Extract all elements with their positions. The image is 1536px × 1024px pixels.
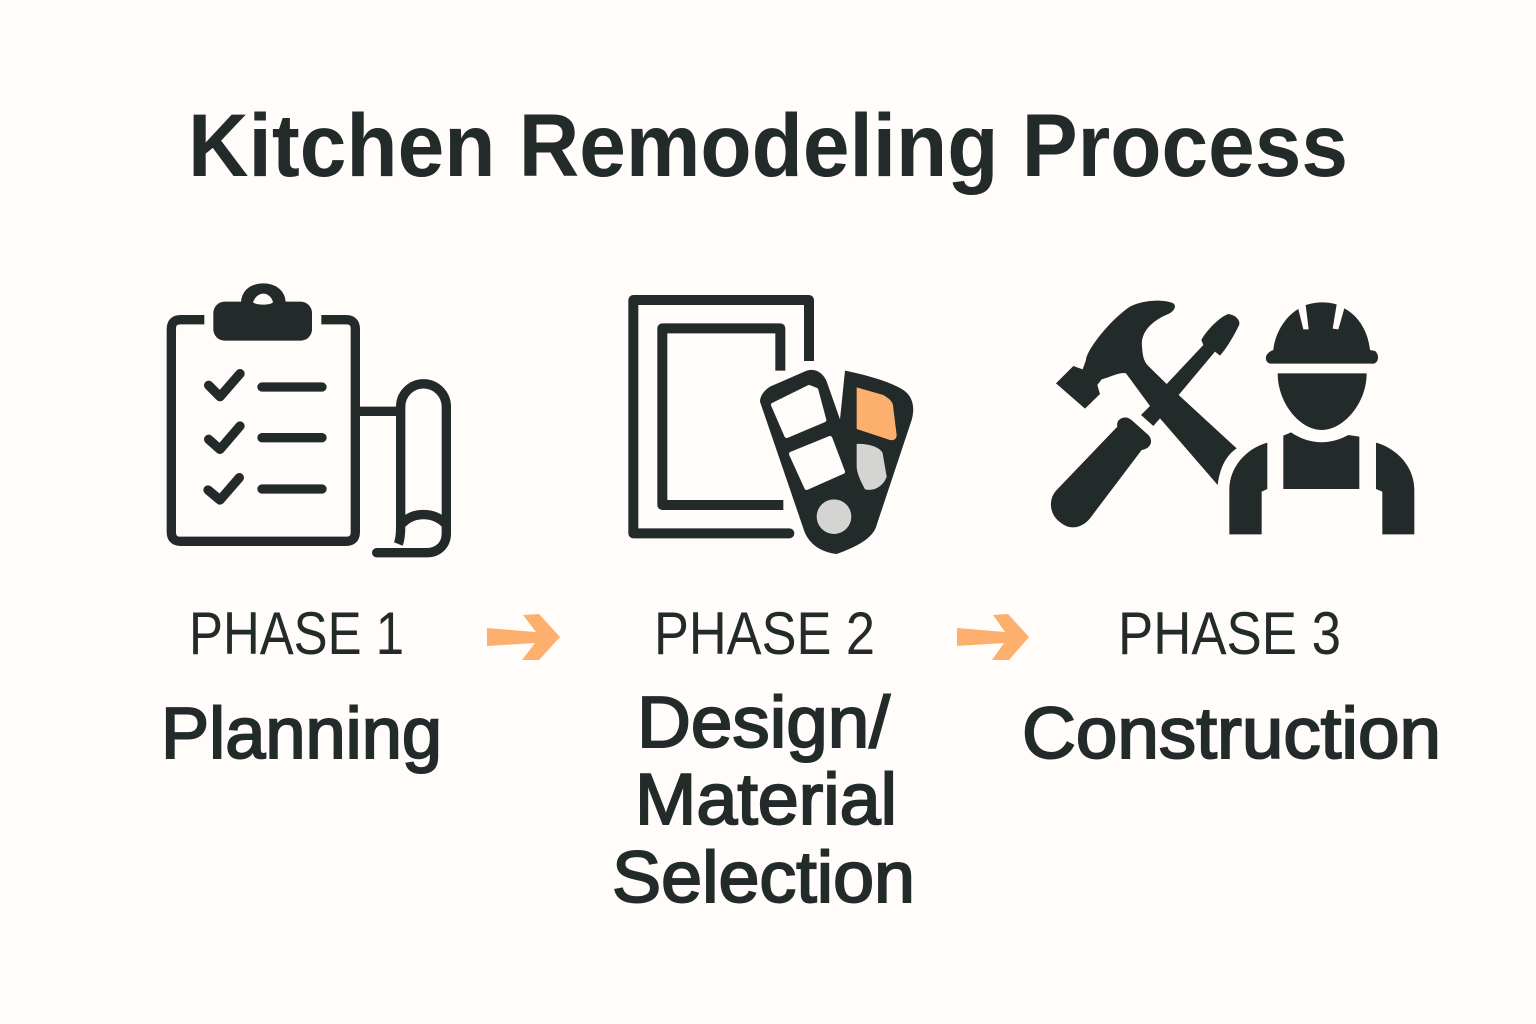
icon: clipboard checklist and blueprint roll [171, 283, 446, 553]
phase 2 name [612, 683, 915, 918]
icon: door frame and material swatches [633, 300, 913, 554]
arrow: phase 2 to phase 3 [957, 614, 1029, 660]
icon: crossed hammer and screwdriver with construction worker [1051, 301, 1414, 534]
phase 2 name: Selection [612, 838, 915, 918]
phase 2 name: Design/ [637, 683, 890, 763]
phase 3 label: PHASE 3 [1118, 600, 1341, 667]
phase 1 name: Planning [161, 694, 442, 774]
phase 2 label: PHASE 2 [654, 600, 875, 667]
phase 2 name: Material [635, 760, 897, 840]
phase 3 name: Construction [1022, 694, 1441, 774]
phase 1 label: PHASE 1 [189, 600, 404, 667]
title: Kitchen Remodeling Process [188, 95, 1348, 195]
arrow: phase 1 to phase 2 [487, 614, 560, 660]
